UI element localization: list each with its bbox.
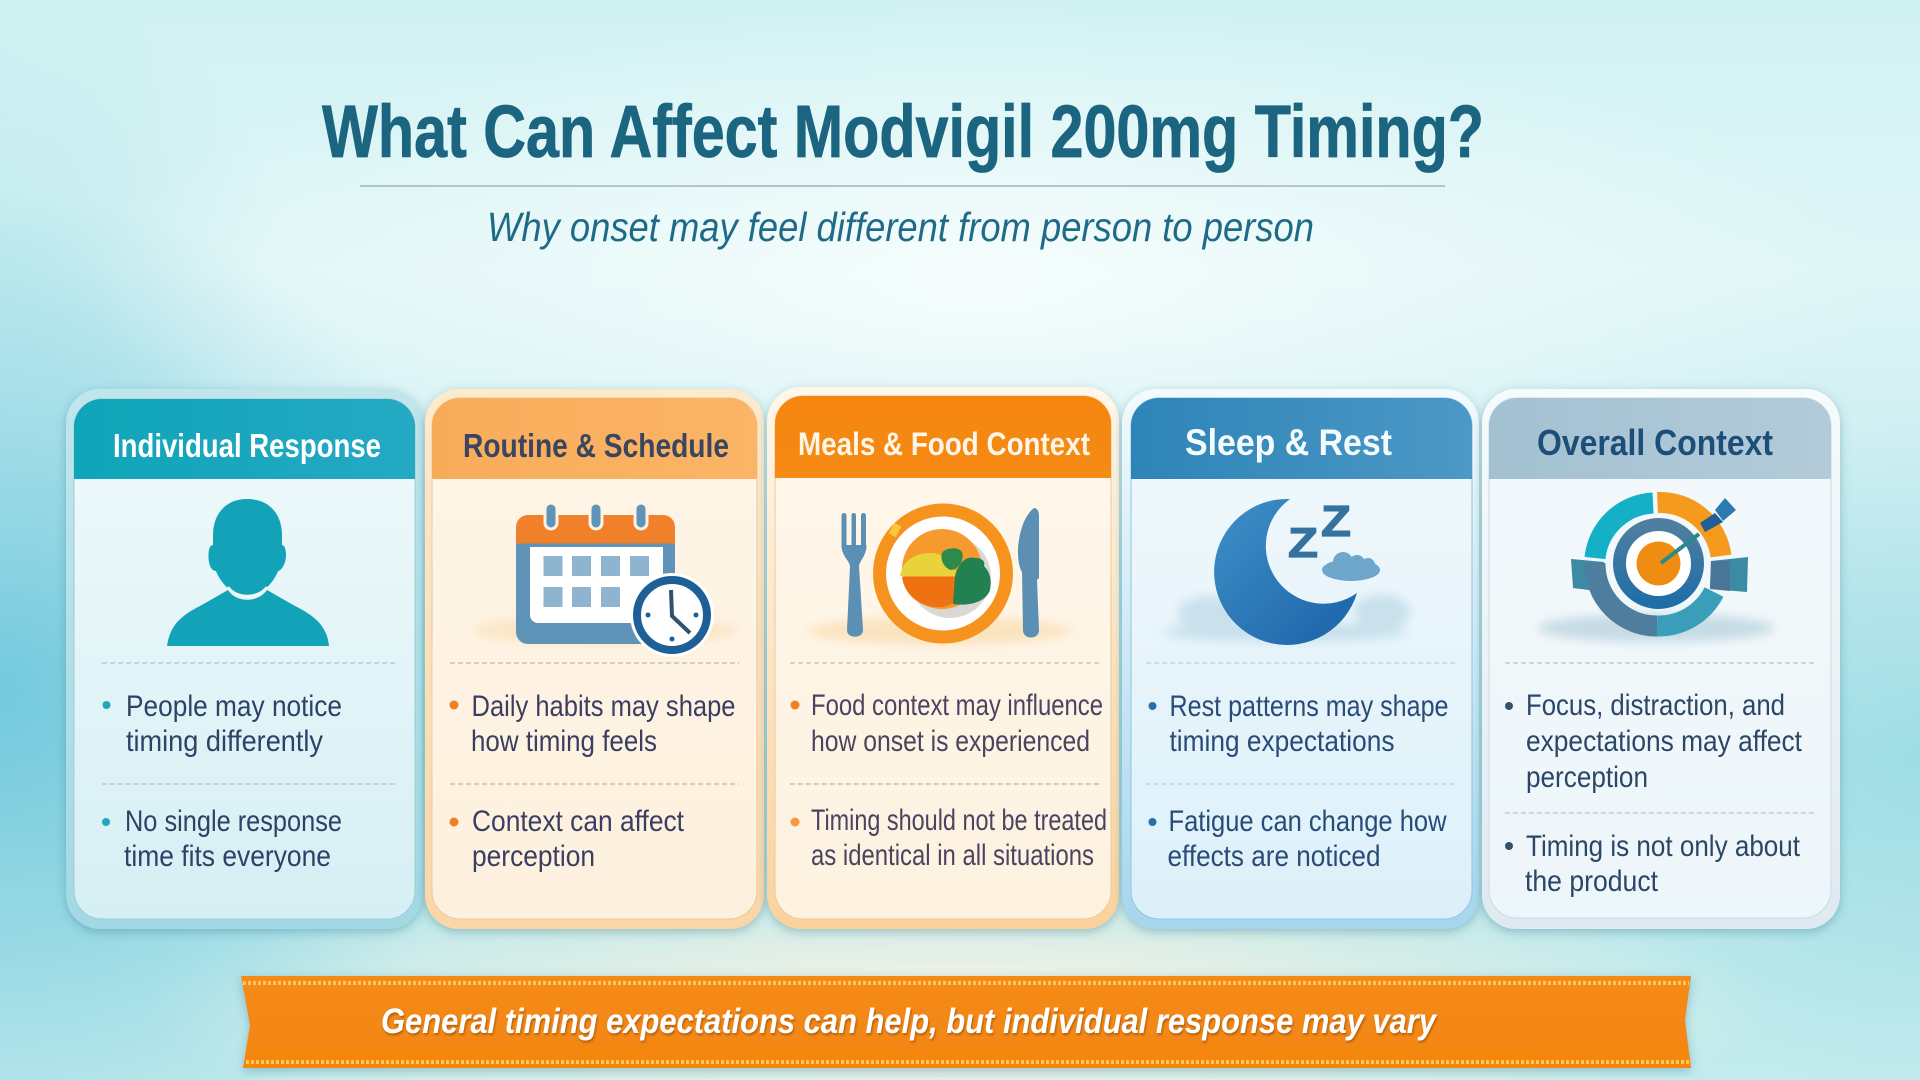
bullet: fatigue (1148, 805, 1447, 873)
panel: sleep and rest (1122, 389, 1479, 929)
panel: individual response (66, 389, 422, 929)
bullet: fatigue: effects are noticed (1168, 840, 1380, 873)
icon: crescent moon (1163, 497, 1410, 645)
bullet: timing not only (1505, 830, 1801, 898)
bullet: no single response: No single response (125, 805, 342, 838)
bullet: timing not only: Timing is not only about (1526, 830, 1801, 863)
header: overall context (1489, 398, 1831, 479)
bullet: daily habits: how timing feels (471, 725, 657, 758)
header: individual response: Individual Response (113, 427, 381, 464)
header: overall context: Overall Context (1537, 422, 1773, 463)
icon: target with dart (1538, 498, 1774, 642)
bullet: timing should not (790, 804, 1107, 872)
header: meals and food context (775, 396, 1111, 478)
header: individual response (74, 399, 415, 479)
panel: meals and food context (767, 387, 1119, 929)
bullet: people may notice: People may notice (126, 690, 342, 723)
bullet: daily habits (450, 690, 736, 758)
panel: routine and schedule (425, 389, 764, 929)
bullet: context can affect: Context can affect (472, 805, 685, 838)
title divider (360, 185, 1445, 187)
bullet: food context (790, 689, 1103, 758)
bullet: rest patterns: timing expectations (1170, 725, 1394, 758)
bullet: fatigue: Fatigue can change how (1168, 805, 1447, 838)
bullet: focus distraction: expectations may affect (1526, 725, 1803, 758)
header: sleep and rest: Sleep & Rest (1185, 422, 1392, 463)
bullet: rest patterns (1148, 690, 1448, 758)
bullet: rest patterns: Rest patterns may shape (1170, 690, 1448, 723)
bullet: focus distraction: perception (1526, 761, 1648, 794)
bullet: focus distraction: Focus, distraction, and (1526, 689, 1785, 722)
header: routine and schedule (432, 398, 757, 479)
bullet: food context: how onset is experienced (811, 725, 1090, 758)
subtitle: Why onset may feel different from person to person (487, 204, 1314, 250)
bullet: daily habits: Daily habits may shape (472, 690, 736, 723)
banner text: General timing expectations can help, but individual response may vary (381, 1002, 1437, 1041)
bullet: focus distraction (1505, 689, 1803, 794)
bullet: timing should not: as identical in all situations (811, 839, 1094, 872)
bullet: timing should not: Timing should not be treated (811, 804, 1107, 837)
icon: person (167, 499, 329, 646)
bullet: no single response (102, 805, 342, 873)
header: sleep and rest (1131, 398, 1472, 479)
header: routine and schedule: Routine & Schedule (463, 427, 729, 464)
bullet: people may notice: timing differently (126, 725, 323, 758)
header: meals and food context: Meals & Food Context (798, 426, 1090, 462)
icon: calendar with clock (472, 503, 738, 657)
icon: crescent moon: Z (1288, 519, 1318, 566)
icon: crescent moon: Z (1321, 497, 1351, 546)
icon: plate with fork and knife (808, 508, 1072, 645)
bullet: no single response: time fits everyone (124, 840, 331, 873)
bullet: people may notice (102, 690, 342, 758)
bullet: context can affect (450, 805, 685, 873)
bullet: context can affect: perception (472, 840, 595, 873)
title: What Can Affect Modvigil 200mg Timing? (322, 90, 1484, 173)
panel: overall context (1482, 389, 1840, 929)
bullet: food context: Food context may influence (811, 689, 1103, 722)
bullet: timing not only: the product (1525, 865, 1659, 898)
banner (241, 976, 1691, 1068)
